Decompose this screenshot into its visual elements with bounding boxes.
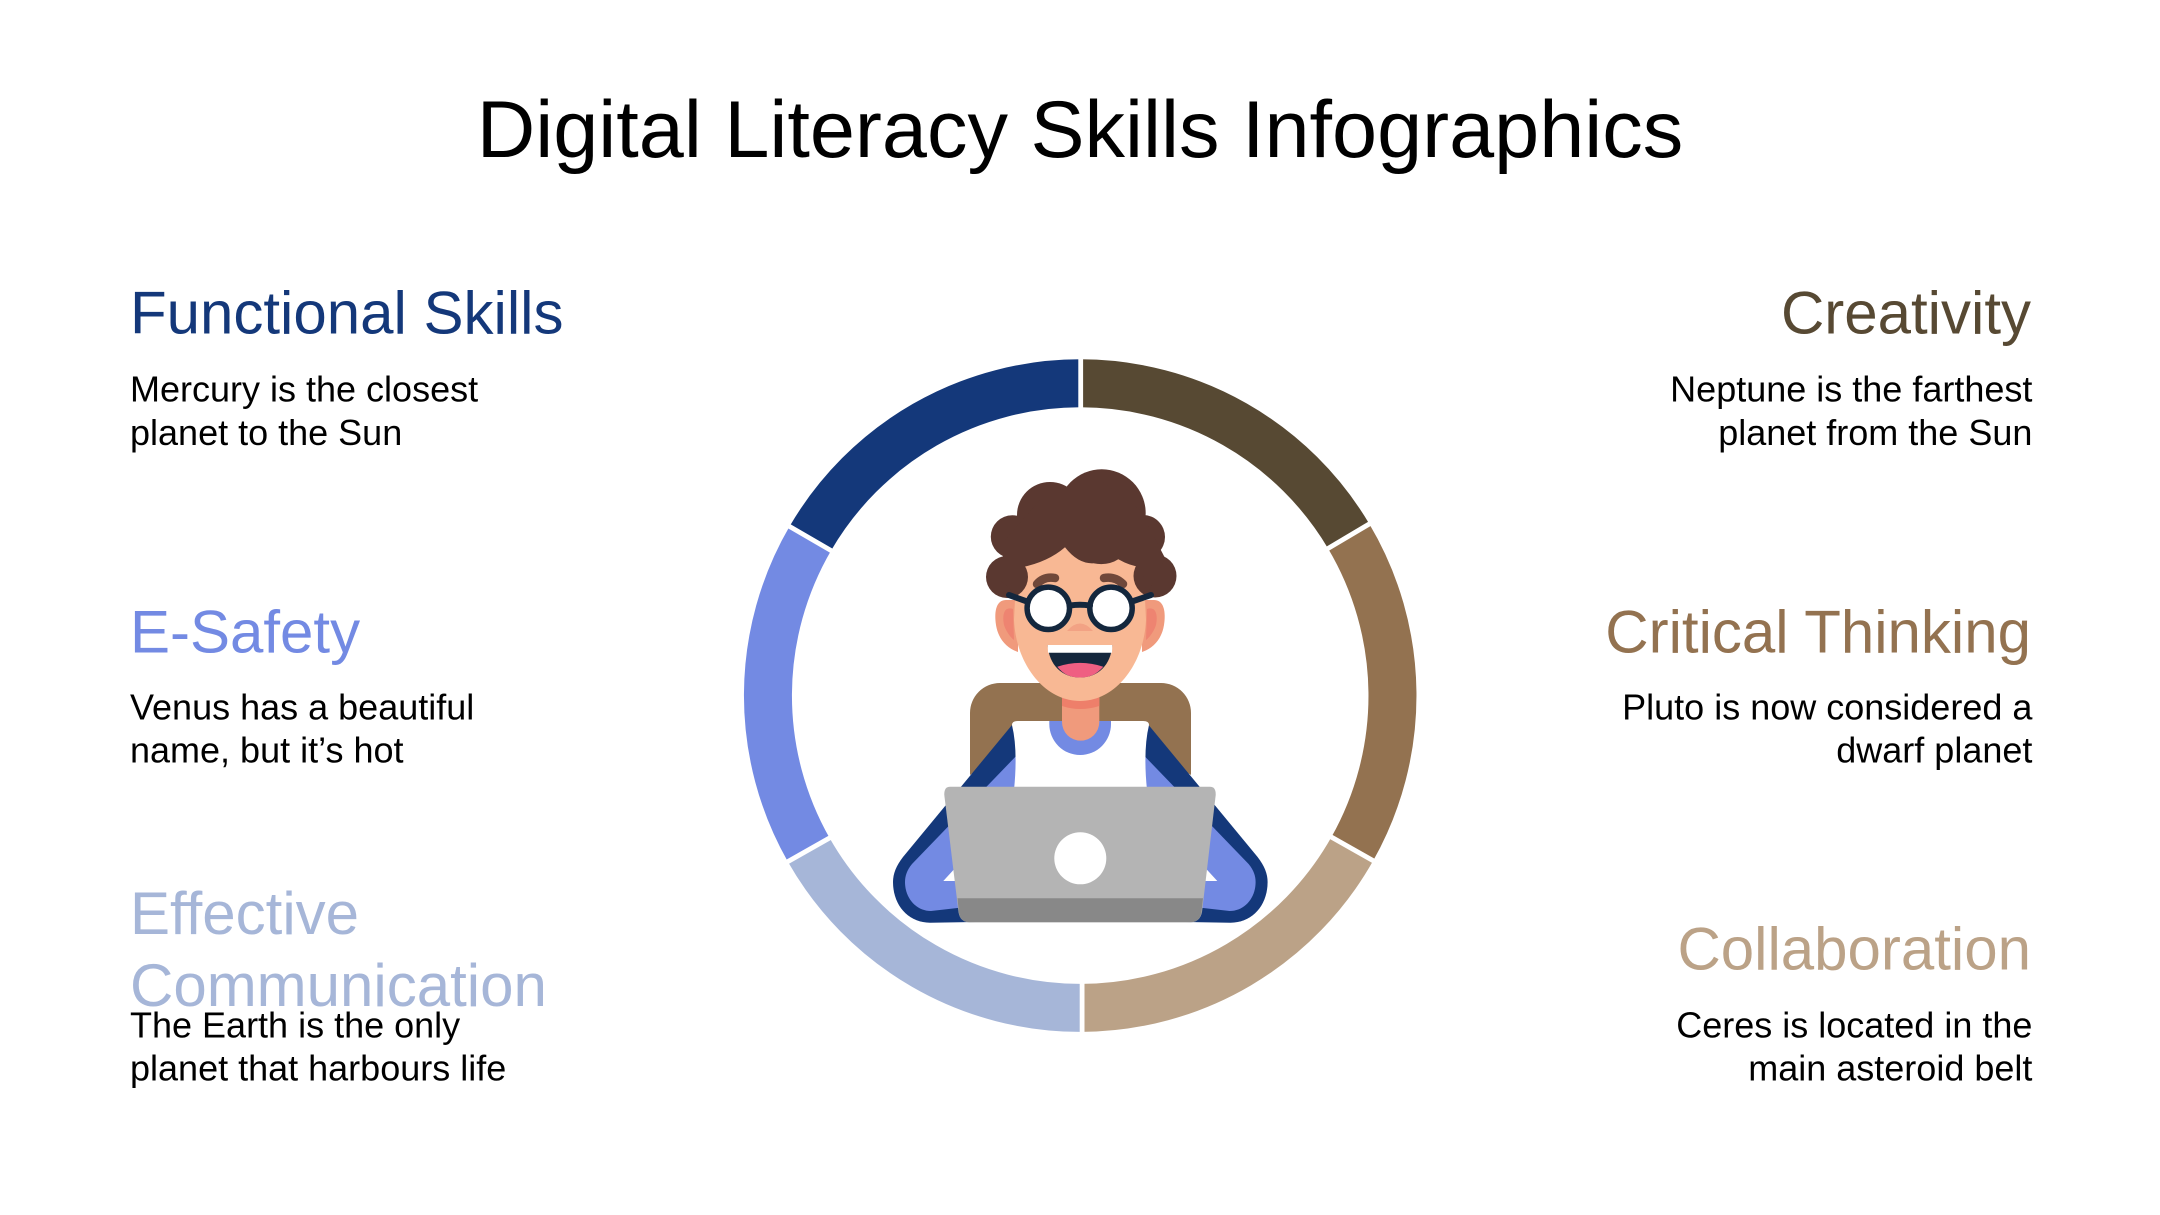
illustration: person with laptop <box>893 469 1268 923</box>
right arm <box>1131 725 1268 923</box>
hair <box>986 469 1176 598</box>
mouth <box>1048 645 1112 678</box>
left arm <box>893 725 1030 923</box>
right ear <box>1142 600 1165 652</box>
heading: E-Safety: E-Safety <box>130 599 360 666</box>
heading: Effective Communication: Communication <box>130 952 547 1019</box>
text: E-Safety description: Venus has a beautiful <box>130 686 474 727</box>
chair <box>970 683 1191 775</box>
heading: Collaboration: Collaboration <box>1677 916 2031 983</box>
text: Critical Thinking description: dwarf planet <box>1836 730 2032 771</box>
text: Collaboration description: Ceres is located in the <box>1676 1004 2032 1045</box>
eyebrows <box>1037 578 1123 584</box>
neck <box>1062 695 1099 741</box>
panel: Effective Communication <box>130 880 547 1089</box>
laptop <box>944 787 1216 922</box>
text: Effective Communication description: planet that harbours life <box>130 1048 506 1089</box>
left ear <box>995 600 1018 652</box>
collar <box>1049 721 1111 755</box>
panel: Collaboration <box>1676 916 2032 1089</box>
text: Functional Skills description: planet to the Sun <box>130 412 402 453</box>
glasses <box>1009 587 1151 630</box>
neck shadow <box>1062 695 1099 709</box>
heading: Critical Thinking: Critical Thinking <box>1605 599 2031 666</box>
heading: Functional Skills: Functional Skills <box>130 280 564 347</box>
nose <box>1067 624 1093 631</box>
heading: Creativity: Creativity <box>1781 280 2031 347</box>
text: E-Safety description: name, but it’s hot <box>130 730 404 771</box>
text: Creativity description: Neptune is the farthest <box>1670 369 2032 410</box>
text: Collaboration description: main asteroid belt <box>1748 1048 2032 1089</box>
title: Digital Literacy Skills Infographics <box>477 85 1683 175</box>
text: Effective Communication description: The Earth is the only <box>130 1004 460 1045</box>
panel: Creativity <box>1670 280 2032 453</box>
text: Functional Skills description: Mercury is the closest <box>130 369 478 410</box>
shirt <box>1012 721 1149 790</box>
panel: Critical Thinking <box>1605 599 2033 771</box>
panel: Functional Skills <box>130 280 564 453</box>
donut ring <box>768 350 1392 1040</box>
heading: Effective Communication: Effective <box>130 880 359 947</box>
text: Critical Thinking description: Pluto is now considered a <box>1622 686 2033 727</box>
face <box>1014 535 1146 701</box>
text: Creativity description: planet from the Sun <box>1718 412 2032 453</box>
panel: E-Safety <box>130 599 474 771</box>
